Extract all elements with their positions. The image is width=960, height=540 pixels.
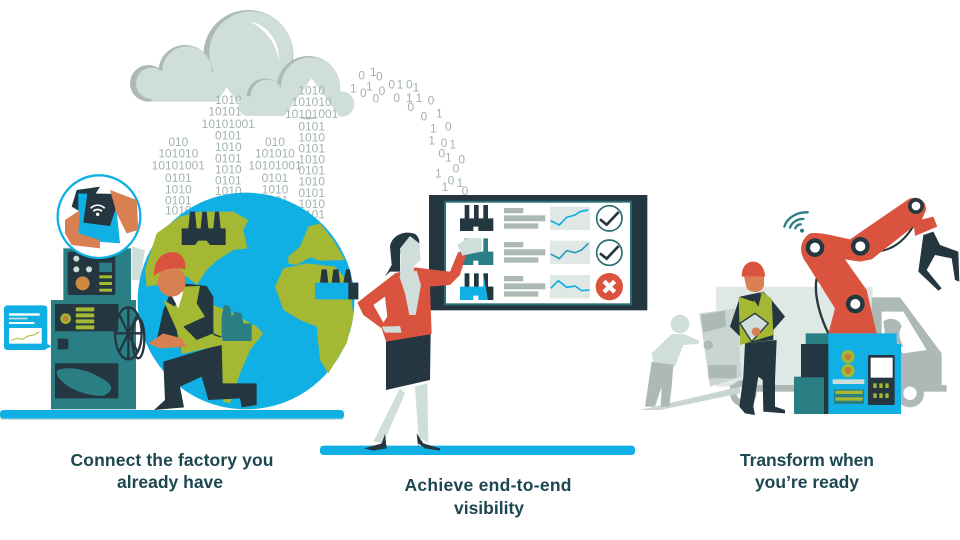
machine pushed on dolly, faded: [640, 308, 742, 410]
icon: large cloud: [130, 10, 293, 102]
caption: transform when ready: you’re ready: [755, 472, 859, 492]
binary data arc to dashboard: 1: [416, 91, 423, 105]
binary data arrow 3: 0101: [262, 193, 289, 207]
caption: end-to-end visibility: visibility: [454, 498, 524, 518]
binary data arc to dashboard: 1: [449, 137, 456, 151]
icon: factory on Africa: [315, 269, 358, 299]
caption: transform when ready: Transform when: [740, 450, 874, 470]
row 3: factory, text bars, trend, cross: [460, 273, 623, 300]
panel: connect the factory: [0, 175, 358, 420]
binary data arc to dashboard: 1: [442, 180, 449, 194]
delivery truck, faded: [716, 287, 947, 407]
binary data arrow 2: 1010: [215, 140, 242, 154]
binary data arrow 4: 10101001: [285, 107, 339, 121]
binary data arc to dashboard: 0: [421, 109, 428, 123]
binary data arrow 1: 10101001: [152, 158, 205, 172]
binary data arrow 4: 0101: [298, 186, 325, 200]
binary data arrow 4: 1010: [298, 175, 325, 189]
panel: transform when ready: [640, 198, 959, 415]
binary data arrow 4: 1010: [298, 153, 325, 167]
binary data arrow 2: 1010: [215, 184, 242, 198]
binary data arrow 2: 10101001: [202, 117, 255, 131]
binary data arrow 1: 010: [168, 135, 189, 149]
icon: small cloud: [238, 56, 354, 119]
callout: machine chart panel: [4, 305, 53, 350]
binary data arc to dashboard: 0: [358, 68, 365, 82]
binary data arc to dashboard: 0: [373, 92, 380, 106]
binary data arc to dashboard: 0: [379, 84, 386, 98]
binary data arrow 3: [248, 135, 302, 207]
binary data arc to dashboard: 0: [393, 91, 400, 105]
binary data arc to dashboard: 1: [445, 151, 452, 165]
binary data arrow 4: 101010: [292, 95, 332, 109]
binary data arrow 4: 1010: [298, 197, 325, 211]
kneeling worker: [148, 252, 257, 410]
dashboard screen: [429, 195, 647, 310]
binary data arc to dashboard: 1: [435, 167, 442, 181]
binary data arc to dashboard: 0: [406, 77, 413, 91]
binary data arrow 2: 1010: [215, 163, 242, 177]
binary data arrow 1: 0101: [165, 171, 192, 185]
binary data arrow 3: 10101001: [248, 158, 302, 172]
binary data arrow 2: 0101: [215, 128, 242, 142]
ground line: [0, 410, 344, 420]
row 1: factory, text bars, trend, check: [460, 205, 622, 231]
icon: factory on North America: [182, 212, 226, 245]
binary data arc to dashboard: 1: [413, 81, 420, 95]
binary data arrow 4: 0101: [298, 208, 325, 222]
binary data arc to dashboard: [350, 65, 469, 198]
panel: dashboard and presenter: [320, 195, 647, 455]
binary data arc to dashboard: 0: [453, 162, 460, 176]
binary data arc to dashboard: 0: [445, 119, 452, 133]
row 2: factory, text bars, trend, check: [457, 238, 622, 265]
ground line: [320, 446, 635, 455]
machine upper control unit: [63, 248, 131, 300]
binary data arrow 1: 101010: [158, 147, 199, 161]
binary data arc to dashboard: 0: [448, 173, 455, 187]
caption: connect the factory: Connect the factory you: [70, 450, 274, 470]
standing worker with tablet: [730, 262, 785, 415]
binary data arc to dashboard: 1: [406, 91, 413, 105]
binary data arrow 1: 1010: [165, 182, 192, 196]
binary data arrow 1: [152, 135, 205, 217]
binary data arc to dashboard: 0: [462, 184, 469, 198]
binary data arc to dashboard: 0: [376, 69, 383, 83]
binary data arrow 2: 1010: [215, 93, 242, 107]
binary data arc to dashboard: 0: [458, 153, 465, 167]
binary data arrow 2: 0101: [215, 152, 242, 166]
binary data arrow 3: 010: [265, 135, 285, 149]
binary data arrow 4: 1010: [298, 84, 325, 98]
machine wheel: [115, 307, 144, 359]
binary data arc to dashboard: 0: [407, 100, 414, 114]
binary data arrow 3: 0101: [262, 171, 289, 185]
icon: factory on South America: [222, 305, 252, 341]
binary data arc to dashboard: 1: [366, 79, 373, 93]
binary data arc to dashboard: 1: [436, 107, 443, 121]
robot arm: [801, 198, 937, 333]
binary data arrow 4: [283, 78, 340, 222]
binary data arc to dashboard: 0: [388, 77, 395, 91]
binary data arrow 2: [200, 87, 257, 198]
binary data arrow 4: 0101: [298, 142, 325, 156]
pushing worker, faded: [645, 315, 699, 407]
binary data arc to dashboard: 1: [430, 122, 437, 136]
caption: end-to-end visibility: Achieve end-to-end: [404, 475, 572, 495]
binary data arc to dashboard: 0: [441, 136, 448, 150]
binary data arrow 4: 0101: [298, 119, 325, 133]
binary data arc to dashboard: 1: [350, 82, 357, 96]
binary data arc to dashboard: 1: [397, 77, 404, 91]
binary data arrow 1: 1010: [165, 203, 192, 217]
robot base blocks: [794, 333, 901, 414]
binary data arrow 3: 101010: [255, 147, 295, 161]
binary data arrow 4: 1010: [298, 130, 325, 144]
binary data arrow 2: 0101: [215, 173, 242, 187]
caption: connect the factory: already have: [117, 472, 223, 492]
globe: [132, 193, 354, 409]
binary data arrow 2: 101010: [208, 105, 249, 119]
binary data arc to dashboard: 1: [428, 133, 435, 147]
icon: wifi signal: [784, 212, 808, 233]
binary data arc to dashboard: 0: [438, 147, 445, 161]
binary data arrow 3: 1010: [262, 182, 289, 196]
binary data arc to dashboard: 1: [457, 176, 464, 190]
callout: wifi tablet in hands: [58, 175, 140, 258]
binary data arc to dashboard: 0: [360, 86, 367, 100]
robot gripper: [918, 232, 959, 291]
binary data arc to dashboard: 0: [428, 93, 435, 107]
binary data arrow 1: 0101: [165, 193, 192, 207]
binary data arrow 4: 0101: [298, 163, 325, 177]
presenter: [357, 233, 470, 451]
binary data arc to dashboard: 1: [370, 65, 377, 79]
binary machine base: [51, 300, 136, 409]
